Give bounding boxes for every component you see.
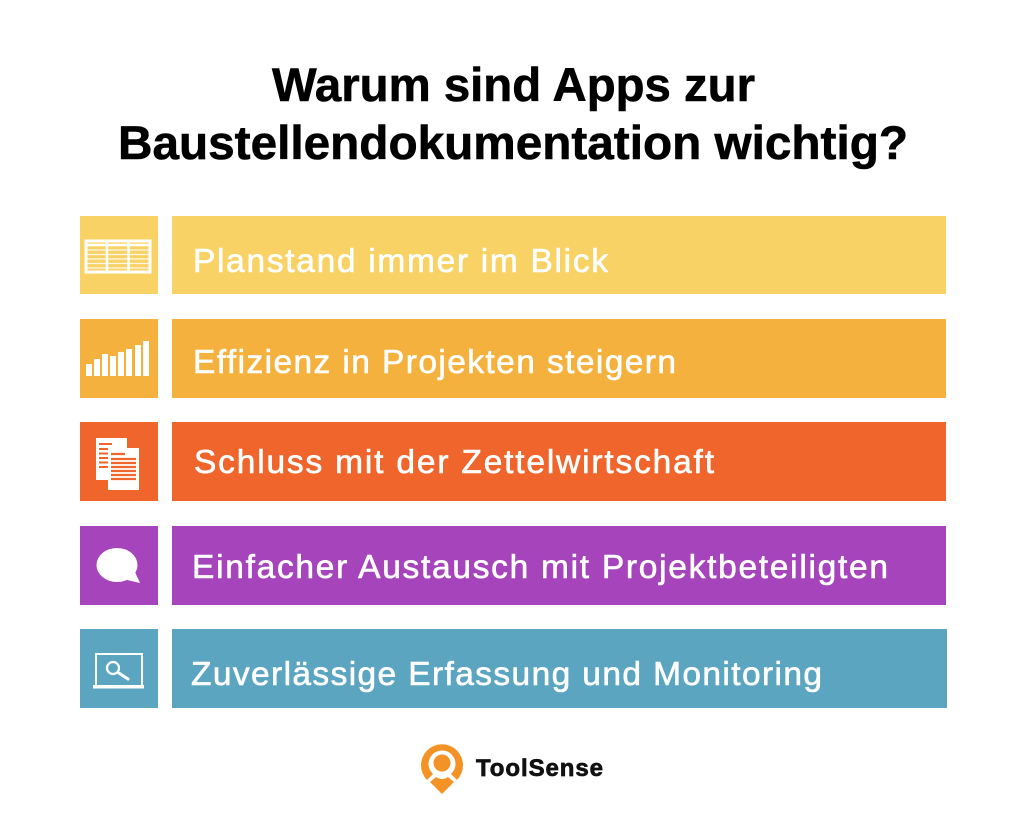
label: Effizienz: Effizienz in Projekten steigern bbox=[193, 344, 676, 381]
row: Effizienz bbox=[80, 319, 946, 398]
icon: paper documents bbox=[80, 422, 158, 501]
bar: Planstand bbox=[172, 216, 946, 294]
icon: speech bubble bbox=[80, 526, 158, 605]
bar: Schluss bbox=[172, 422, 946, 501]
bar: Monitoring bbox=[172, 629, 947, 708]
title bbox=[118, 58, 908, 169]
row: Austausch bbox=[80, 526, 946, 605]
title: Warum sind Apps zur bbox=[272, 58, 755, 111]
icon: table plan bbox=[80, 216, 158, 294]
label: Planstand: Planstand immer im Blick bbox=[193, 243, 608, 280]
logo: ToolSense bbox=[421, 744, 603, 794]
bar: Effizienz bbox=[172, 319, 946, 398]
title: Baustellendokumentation wichtig? bbox=[118, 116, 908, 169]
icon: rising bars bbox=[80, 319, 158, 398]
row: Schluss bbox=[80, 422, 946, 501]
icon: laptop with magnifier bbox=[80, 629, 158, 708]
icon: orange location pin bbox=[421, 744, 463, 794]
row: Monitoring bbox=[80, 629, 947, 708]
row: Planstand bbox=[80, 216, 946, 294]
label: Schluss: Schluss mit der Zettelwirtschaft bbox=[194, 444, 715, 481]
label: Austausch: Einfacher Austausch mit Projektbeteiligten bbox=[192, 549, 888, 586]
label: Monitoring: Zuverlässige Erfassung und Monitoring bbox=[191, 656, 822, 693]
bar: Austausch bbox=[172, 526, 946, 605]
wordmark: ToolSense bbox=[476, 755, 603, 782]
